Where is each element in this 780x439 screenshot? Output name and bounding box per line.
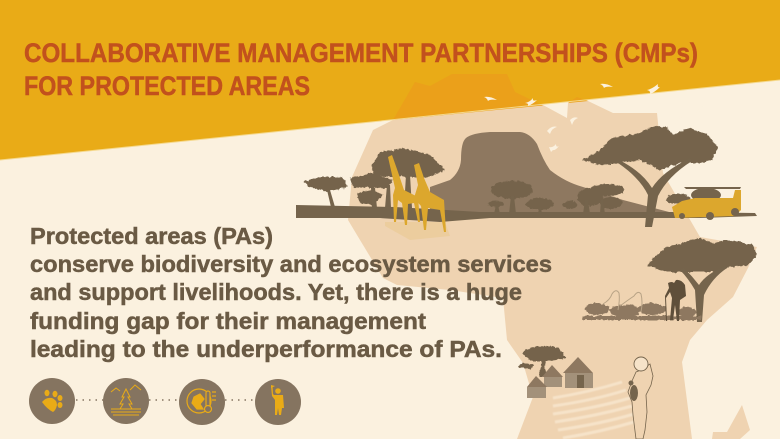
title: COLLABORATIVE MANAGEMENT PARTNERSHIPS (CMPs) (24, 38, 698, 68)
woman carrying basket (628, 357, 653, 439)
icon: person with flag (255, 379, 301, 425)
intro paragraph (30, 223, 552, 362)
title (24, 38, 698, 101)
hiker (665, 280, 686, 321)
safari jeep (672, 187, 741, 220)
title: FOR PROTECTED AREAS (24, 71, 310, 101)
icon row (29, 378, 301, 425)
header banner (0, 0, 780, 160)
huts (527, 357, 593, 398)
terraced fields (553, 382, 634, 438)
icon: tree and water (103, 378, 149, 424)
icon: globe and thermometer (179, 379, 225, 425)
intro paragraph: leading to the underperformance of PAs. (30, 336, 502, 362)
intro paragraph: funding gap for their management (30, 308, 426, 334)
village (518, 346, 593, 398)
tree trunks (327, 158, 692, 227)
intro paragraph: conserve biodiversity and ecosystem services (30, 251, 552, 277)
connecting dots (76, 399, 255, 401)
shrubs (583, 303, 701, 320)
safari landscape (296, 125, 757, 240)
intro paragraph: Protected areas (PAs) (30, 223, 273, 249)
acacia tree (647, 238, 757, 272)
intro paragraph: and support livelihoods. Yet, there is a huge (30, 279, 522, 305)
mesa (430, 132, 690, 215)
giraffes (385, 155, 450, 240)
gorillas (603, 291, 642, 312)
tree and hiker scene (583, 238, 757, 322)
icon: paw (29, 378, 75, 424)
map of Africa (348, 74, 757, 439)
birds (484, 84, 705, 152)
tree trunk (680, 266, 727, 322)
trees (518, 346, 566, 376)
ground strip (296, 205, 757, 222)
acacia trees (303, 125, 718, 210)
